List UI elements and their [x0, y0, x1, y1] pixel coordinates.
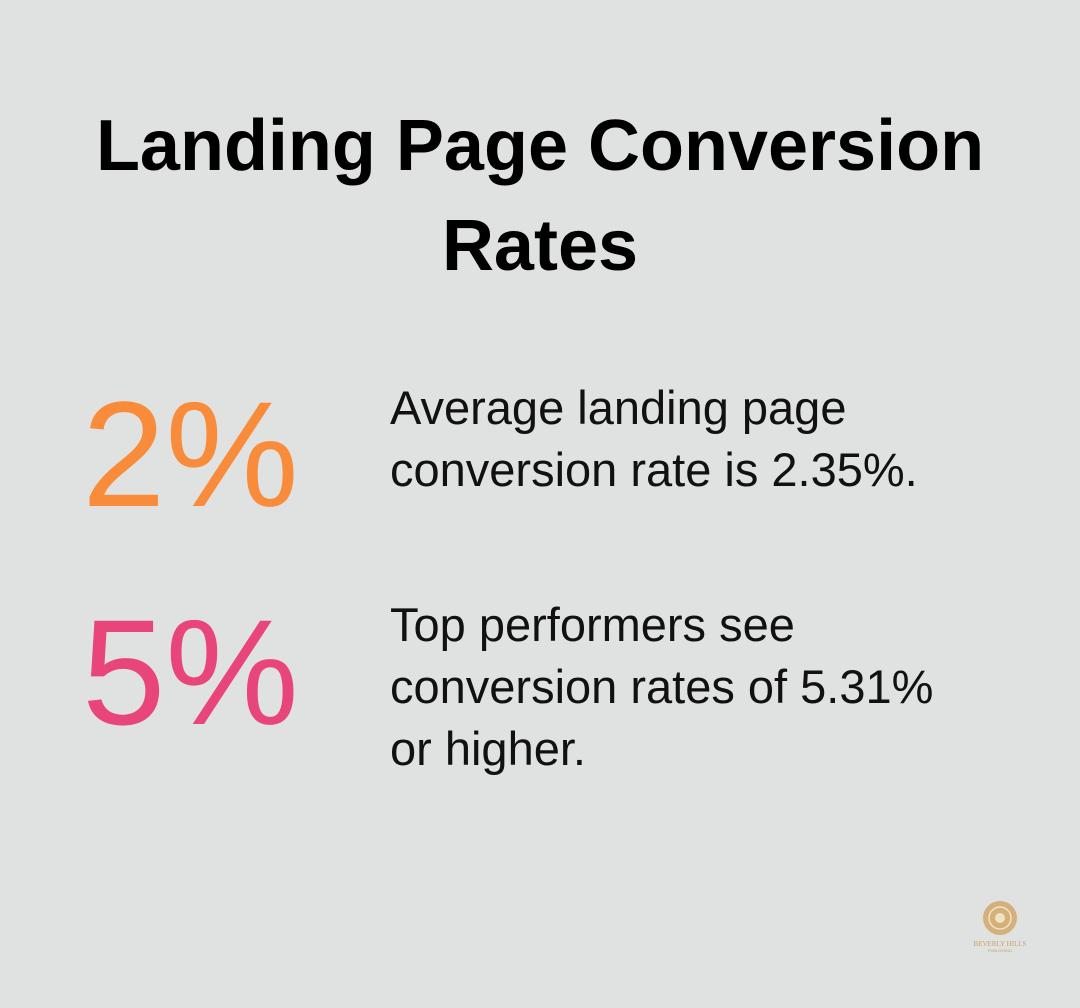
stat 2 text: [390, 598, 933, 775]
title: [96, 106, 984, 286]
stat 2 text: conversion rates of 5.31%: [390, 660, 933, 713]
logo: BEVERLY HILLS: [974, 940, 1026, 948]
stat 2 number: 5%: [82, 588, 299, 756]
logo: PUBLISHING: [988, 948, 1012, 953]
stat 1 text: [390, 381, 918, 496]
stat 1 number: 2%: [82, 370, 299, 538]
icon: logo medallion: [983, 901, 1017, 935]
title: Landing Page Conversion: [96, 106, 984, 186]
logo: [974, 901, 1026, 953]
stat 2 text: Top performers see: [390, 598, 795, 651]
stat 2 text: or higher.: [390, 722, 586, 775]
title: Rates: [442, 206, 638, 286]
stat 1 text: Average landing page: [390, 381, 846, 434]
stat 1 text: conversion rate is 2.35%.: [390, 443, 918, 496]
